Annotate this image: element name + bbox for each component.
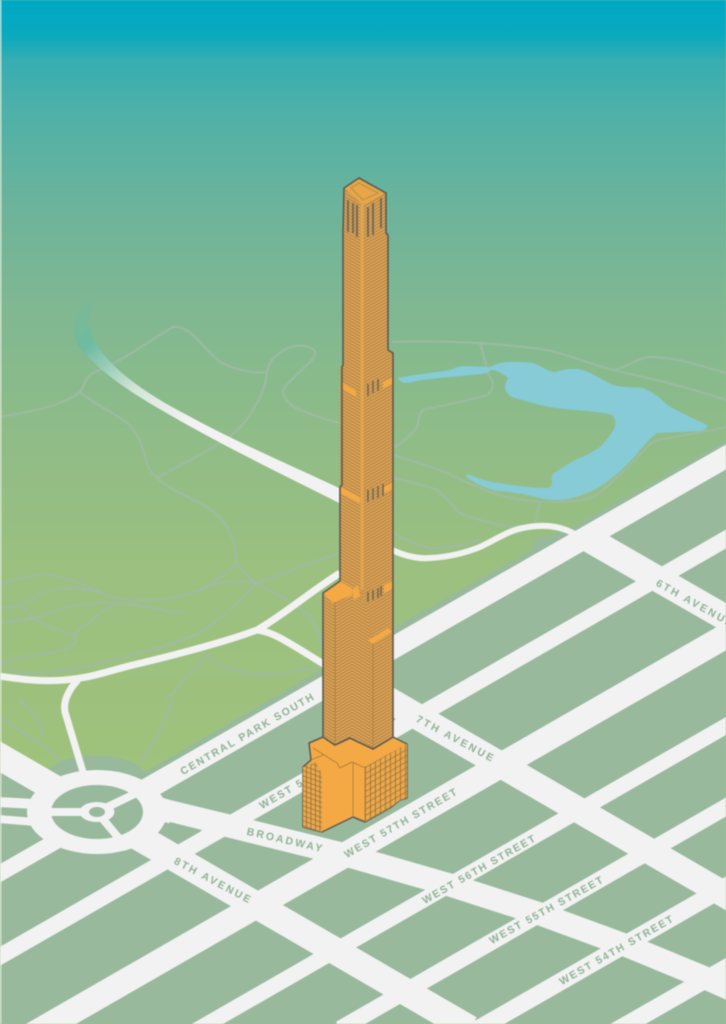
triangle block beside the circle <box>162 822 202 844</box>
street labels <box>172 577 726 988</box>
label: 7th Avenue: 7TH AVENUE <box>414 713 495 764</box>
road: West 54th Street <box>470 875 726 1024</box>
Columbus Circle roundabout <box>27 770 167 854</box>
tower shaft right face <box>362 193 393 640</box>
label: West 56th Street: WEST 56TH STREET <box>420 833 538 907</box>
street grid <box>0 446 726 1024</box>
road: West 56th Street <box>190 714 726 1024</box>
road: 7th Avenue <box>375 692 726 907</box>
park footpaths <box>0 327 726 763</box>
lake <box>398 362 707 500</box>
label: West 55th Street: WEST 55TH STREET <box>487 874 606 947</box>
tower corner highlight <box>360 205 364 590</box>
tower podium <box>303 737 407 832</box>
tower shaft left face <box>340 188 362 600</box>
city blocks ground <box>0 441 726 1024</box>
road: 8th Avenue <box>0 751 470 1024</box>
park curved roads <box>0 526 580 772</box>
image edge highlight <box>0 0 2 1024</box>
label: Central Park South: CENTRAL PARK SOUTH <box>178 691 316 778</box>
road: West 55th Street <box>340 796 726 1024</box>
label: 8th Avenue: 8TH AVENUE <box>172 855 253 906</box>
road: Broadway <box>130 800 726 996</box>
road: 6th Avenue <box>590 540 726 630</box>
road: Central Park South <box>100 446 726 816</box>
road: West 58th Street <box>0 528 726 962</box>
label: West 54th Street: WEST 54TH STREET <box>557 913 676 988</box>
road: West 53rd Street <box>600 956 726 1024</box>
setback bright bands and mechanical floors <box>323 378 392 644</box>
tower roof <box>344 178 386 205</box>
tower lower wings <box>323 590 393 749</box>
road: Broadway west stub upper <box>0 802 35 804</box>
supertall tower <box>303 178 407 832</box>
crown dark slits <box>348 198 381 237</box>
road: Central Park South stub <box>0 816 100 879</box>
label: Broadway: BROADWAY <box>245 826 323 855</box>
road: West 57th Street <box>0 624 726 1024</box>
tower outline <box>323 178 393 749</box>
label: West 58th partially hidden: WEST 5 <box>257 777 305 812</box>
park road fading into the distance <box>73 292 339 503</box>
road: Broadway west stub lower <box>0 819 35 822</box>
label: West 57th Street: WEST 57TH STREET <box>342 786 460 861</box>
